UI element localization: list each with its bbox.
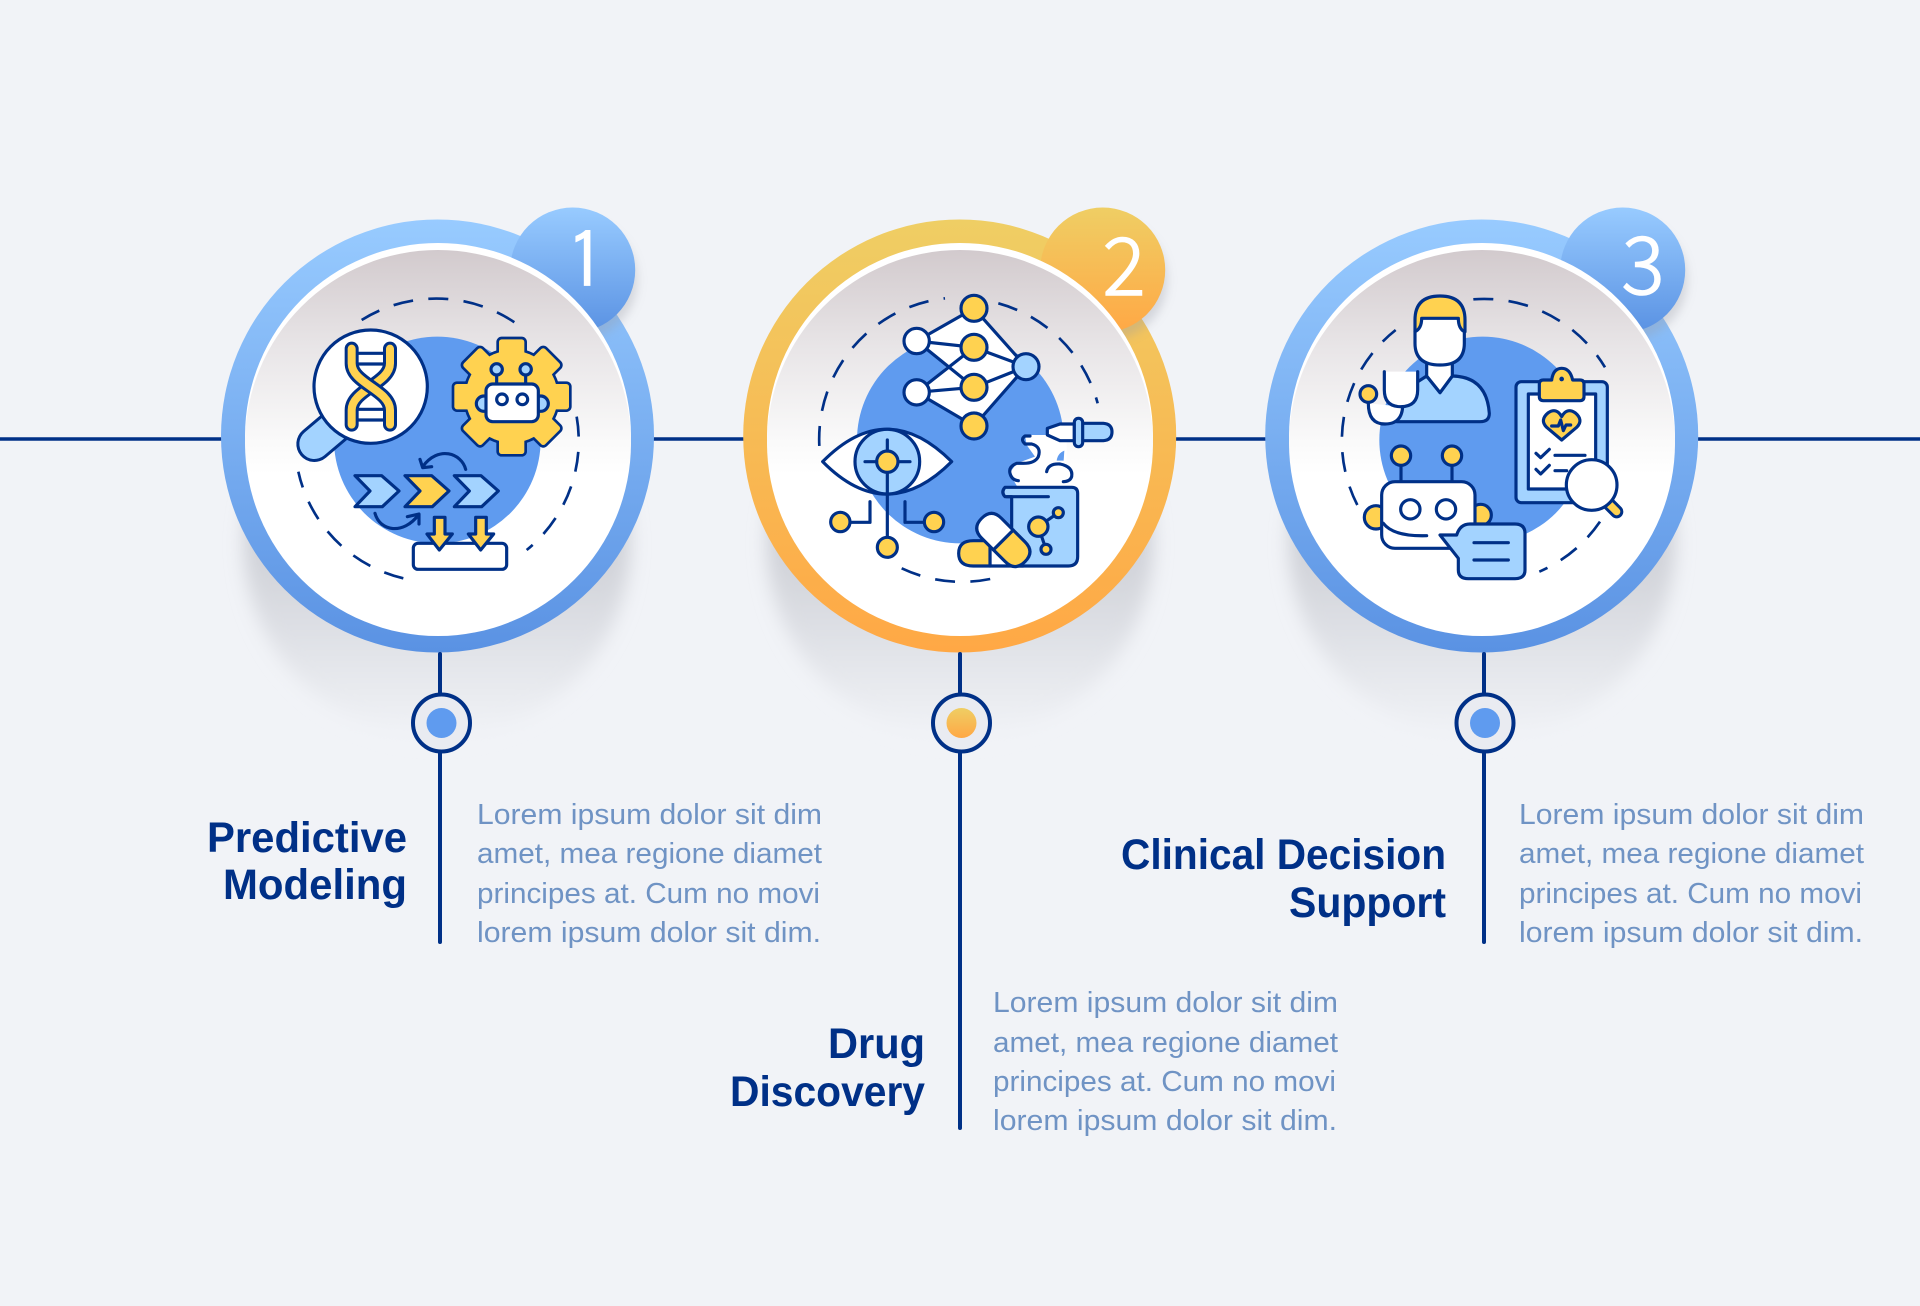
- ring 3: [1265, 220, 1698, 652]
- description 3: Lorem ipsum dolor sit dim: [1519, 799, 1864, 831]
- badge shadow 3: [1567, 220, 1687, 340]
- inner disc 3: [1289, 243, 1675, 636]
- description 1: lorem ipsum dolor sit dim.: [477, 917, 821, 949]
- connector 2: [933, 654, 990, 1128]
- blue backdrop: [334, 337, 541, 543]
- dashed ring: [1342, 299, 1605, 572]
- badge 3: [1560, 208, 1685, 332]
- inner disc 1: [245, 243, 631, 636]
- icon group: drug discovery: [819, 295, 1112, 582]
- shadow: circle 1: [244, 352, 630, 738]
- dashed ring: [819, 298, 1098, 582]
- icon: pills: [959, 508, 1035, 572]
- description 3: lorem ipsum dolor sit dim.: [1519, 917, 1863, 949]
- badge shadow 2: [1047, 220, 1167, 340]
- heading: predictive modeling: Modeling: [223, 861, 407, 909]
- heading: drug discovery: Discovery: [730, 1068, 925, 1116]
- icon: clipboard: [1516, 368, 1607, 503]
- badge shadow 1: [517, 220, 637, 340]
- heading: predictive modeling: Predictive: [207, 814, 407, 862]
- icon group: clinical decision support: [1342, 296, 1617, 579]
- shadow: circle 3: [1289, 352, 1675, 738]
- ring 2: [743, 220, 1176, 652]
- description 3: principes at. Cum no movi: [1519, 878, 1862, 910]
- ring 1: [221, 220, 654, 652]
- number 2: 2: [1103, 203, 1145, 319]
- description 3: [1519, 799, 1864, 949]
- icon: chatbot: [1364, 446, 1491, 548]
- badge 2: [1040, 208, 1165, 332]
- connector 1: [413, 654, 470, 942]
- panel: step 3 circle: [1265, 202, 1698, 652]
- icon: neural network: [904, 295, 1039, 439]
- shadow: circle 2: [767, 352, 1153, 738]
- description 1: Lorem ipsum dolor sit dim: [477, 799, 822, 831]
- description 1: amet, mea regione diamet: [477, 838, 822, 870]
- icon group: predictive modeling: [298, 299, 579, 578]
- icon: eye with circuits: [823, 429, 952, 557]
- heading: clinical decision support: Support: [1289, 879, 1446, 927]
- description 2: amet, mea regione diamet: [993, 1027, 1338, 1059]
- description 1: principes at. Cum no movi: [477, 878, 820, 910]
- number 3: 3: [1622, 202, 1664, 318]
- icon: process chevrons: [355, 454, 498, 529]
- description 1: [477, 799, 822, 949]
- description 3: amet, mea regione diamet: [1519, 838, 1864, 870]
- heading: clinical decision support: Clinical Decision: [1121, 831, 1446, 879]
- icon: steam: [1009, 435, 1072, 488]
- blue backdrop: [1379, 337, 1586, 543]
- badge 1: [510, 208, 635, 332]
- icon: gear robot: [454, 339, 569, 454]
- icon: pipette: [1047, 418, 1112, 447]
- dashed ring: [298, 299, 579, 578]
- description 2: lorem ipsum dolor sit dim.: [993, 1105, 1337, 1137]
- horizontal timeline: [0, 437, 1920, 441]
- blue backdrop: [857, 337, 1064, 543]
- connector 3: [1456, 654, 1514, 942]
- heading: drug discovery: [730, 1020, 925, 1116]
- panel: step 1 circle: [221, 208, 654, 652]
- heading: predictive modeling: [207, 814, 407, 909]
- number 1: 1: [566, 220, 606, 300]
- icon: beaker with molecule: [1003, 487, 1078, 566]
- description 2: principes at. Cum no movi: [993, 1066, 1336, 1098]
- panel: step 2 circle: [743, 203, 1176, 652]
- inner disc 2: [767, 243, 1153, 636]
- icon: doctor: [1360, 296, 1489, 424]
- description 2: Lorem ipsum dolor sit dim: [993, 987, 1338, 1019]
- heading: clinical decision support: [1121, 831, 1446, 927]
- heading: drug discovery: Drug: [828, 1020, 925, 1068]
- icon: magnifier with dna: [314, 330, 427, 444]
- icon: tray with arrows: [413, 517, 507, 569]
- icon: speech bubble: [1440, 524, 1525, 579]
- description 2: [993, 987, 1338, 1137]
- icon: clipboard magnifier: [1566, 460, 1617, 512]
